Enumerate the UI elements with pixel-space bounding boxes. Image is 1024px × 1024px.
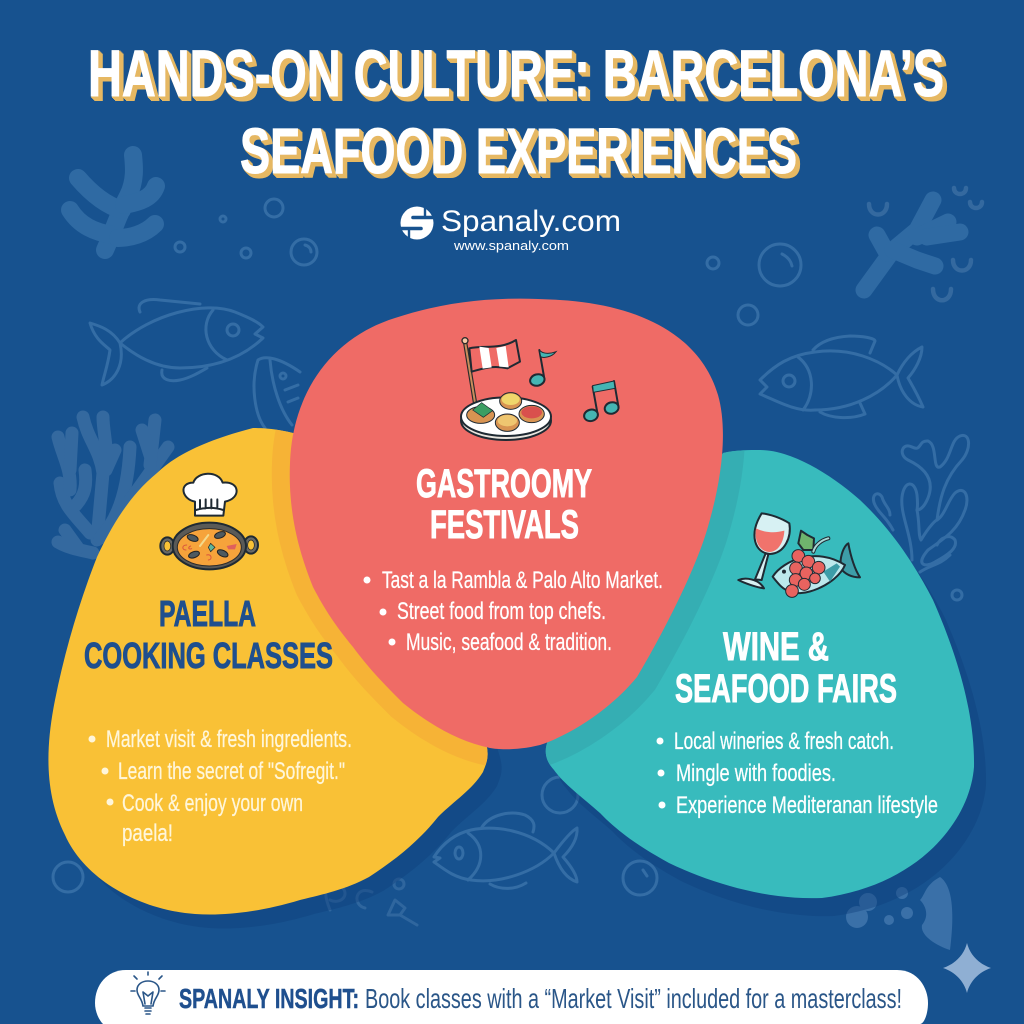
fish right xyxy=(760,336,923,418)
bullet list: festivals: Street food from top chefs. xyxy=(397,598,606,625)
fish left xyxy=(90,300,263,385)
logo: spanaly xyxy=(399,205,621,253)
background sea doodles xyxy=(53,155,982,950)
heading: gastroomy festivals xyxy=(416,462,592,547)
bullet list: wine: Experience Mediteranan lifestyle xyxy=(676,792,938,819)
icon: light bulb xyxy=(131,972,165,1014)
panel: gastroomy festivals xyxy=(290,299,723,749)
bullet list: paella: paela! xyxy=(122,820,173,847)
heading: wine and seafood fairs: SEAFOOD FAIRS xyxy=(675,667,897,711)
insight banner xyxy=(95,970,928,1024)
blob shadows xyxy=(62,442,986,928)
seaweed outline right xyxy=(873,435,969,572)
bullet list: paella: Market visit & fresh ingredients. xyxy=(106,726,352,753)
heading: paella cooking classes: PAELLA xyxy=(159,593,256,634)
title: SEAFOOD EXPERIENCES xyxy=(240,115,797,187)
coral bottom right xyxy=(846,877,952,950)
icon: flag, tapas plate and music notes xyxy=(461,338,620,440)
crescents near right coral xyxy=(869,188,982,300)
coral left xyxy=(58,417,168,553)
doodles bottom left xyxy=(326,879,417,925)
bullet list: festivals: Tast a la Rambla & Palo Alto Market. xyxy=(382,567,663,594)
bullet list: festivals xyxy=(364,567,663,656)
heading: gastroomy festivals: FESTIVALS xyxy=(430,503,579,547)
icon: wine glass, grapes and fish xyxy=(738,513,860,597)
heading: paella cooking classes: COOKING CLASSES xyxy=(84,635,333,676)
bullet list: wine xyxy=(656,728,938,819)
insight text: SPANALY INSIGHT: xyxy=(179,983,359,1014)
heading: wine and seafood fairs: WINE & xyxy=(723,625,829,669)
logo: spanaly: www.spanaly.com xyxy=(453,238,569,253)
icon: chef hat and paella pan xyxy=(160,474,258,569)
panel: wine and seafood fairs xyxy=(290,299,974,898)
panel: paella cooking classes xyxy=(48,299,723,914)
icon: logo mark xyxy=(399,205,435,241)
bullet list: festivals: Music, seafood & tradition. xyxy=(406,629,612,656)
bullet list: paella: Learn the secret of "Sofregit." xyxy=(118,758,345,785)
heading: paella cooking classes xyxy=(84,593,333,676)
bullet list: wine: Mingle with foodies. xyxy=(676,760,836,787)
heading: wine and seafood fairs xyxy=(675,625,897,711)
fish behind red blob xyxy=(254,358,300,428)
bullet list: paella: Cook & enjoy your own xyxy=(122,790,303,817)
fish bottom xyxy=(434,813,577,888)
logo: spanaly: Spanaly.com xyxy=(441,205,621,238)
bubbles xyxy=(53,199,962,895)
sparkle xyxy=(943,943,991,993)
insight text xyxy=(179,983,902,1014)
bullet list: paella xyxy=(88,726,352,847)
coral top right xyxy=(864,200,960,290)
title xyxy=(88,38,944,187)
heading: gastroomy festivals: GASTROOMY xyxy=(416,462,592,506)
coral top left xyxy=(70,155,156,250)
bullet list: wine: Local wineries & fresh catch. xyxy=(674,728,894,755)
